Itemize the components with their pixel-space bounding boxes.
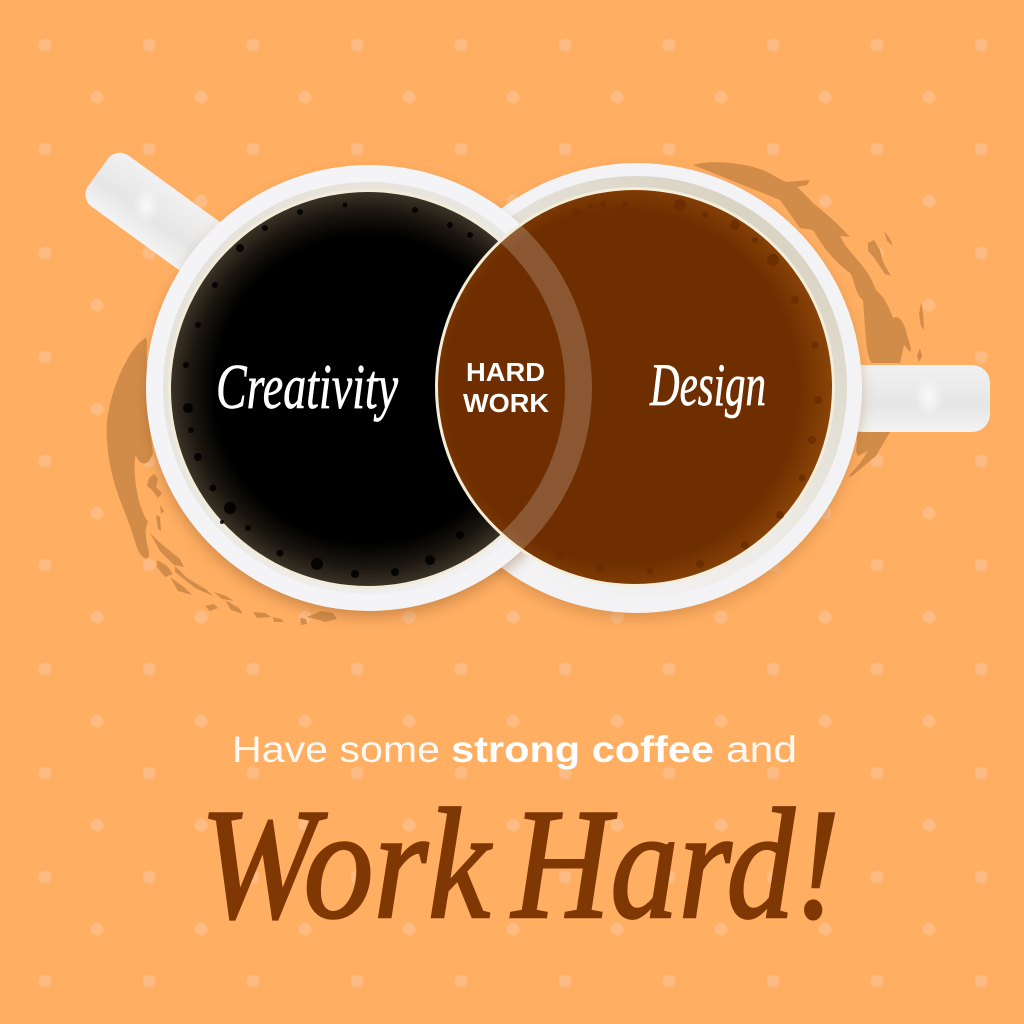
left cup cream ring bbox=[168, 189, 568, 589]
left cup inner wall bbox=[163, 182, 575, 594]
left cup bbox=[79, 147, 592, 617]
right coffee stain bbox=[693, 162, 924, 477]
right cream ring bbox=[435, 187, 835, 587]
label: Hard Work: HARD bbox=[466, 357, 545, 387]
left coffee stain bbox=[107, 338, 337, 625]
right cup rim bbox=[412, 163, 862, 613]
right cup shadow bbox=[413, 170, 861, 618]
label: Design: Design bbox=[649, 352, 766, 418]
headline: Work Hard! bbox=[200, 777, 840, 952]
headline: Work Hard!: Hard! bbox=[510, 777, 840, 952]
right cup handle bbox=[845, 365, 990, 432]
tagline: Have some bbox=[232, 729, 440, 770]
left cup handle bbox=[79, 147, 246, 292]
right coffee overlap bbox=[435, 187, 835, 587]
tagline bbox=[232, 729, 797, 770]
left cup rim bbox=[146, 165, 592, 611]
label: Hard Work: WORK bbox=[463, 388, 549, 418]
label: Hard Work bbox=[463, 357, 549, 418]
brown coffee bubbles bbox=[556, 199, 822, 574]
black coffee bbox=[171, 192, 565, 586]
label: Creativity: Creativity bbox=[216, 351, 398, 422]
right cup bbox=[412, 163, 990, 618]
tagline: and bbox=[726, 729, 797, 770]
left cup rim seen through the overlap bbox=[501, 226, 592, 549]
left handle highlight bbox=[133, 188, 159, 224]
left cup shadow bbox=[147, 173, 591, 617]
tagline: strong coffee bbox=[451, 729, 714, 770]
handle highlight bbox=[915, 377, 943, 417]
right cup inner wall bbox=[425, 176, 847, 598]
headline: Work Hard!: Work bbox=[200, 777, 493, 952]
brown coffee bbox=[438, 190, 832, 584]
black coffee bubbles bbox=[183, 202, 473, 578]
